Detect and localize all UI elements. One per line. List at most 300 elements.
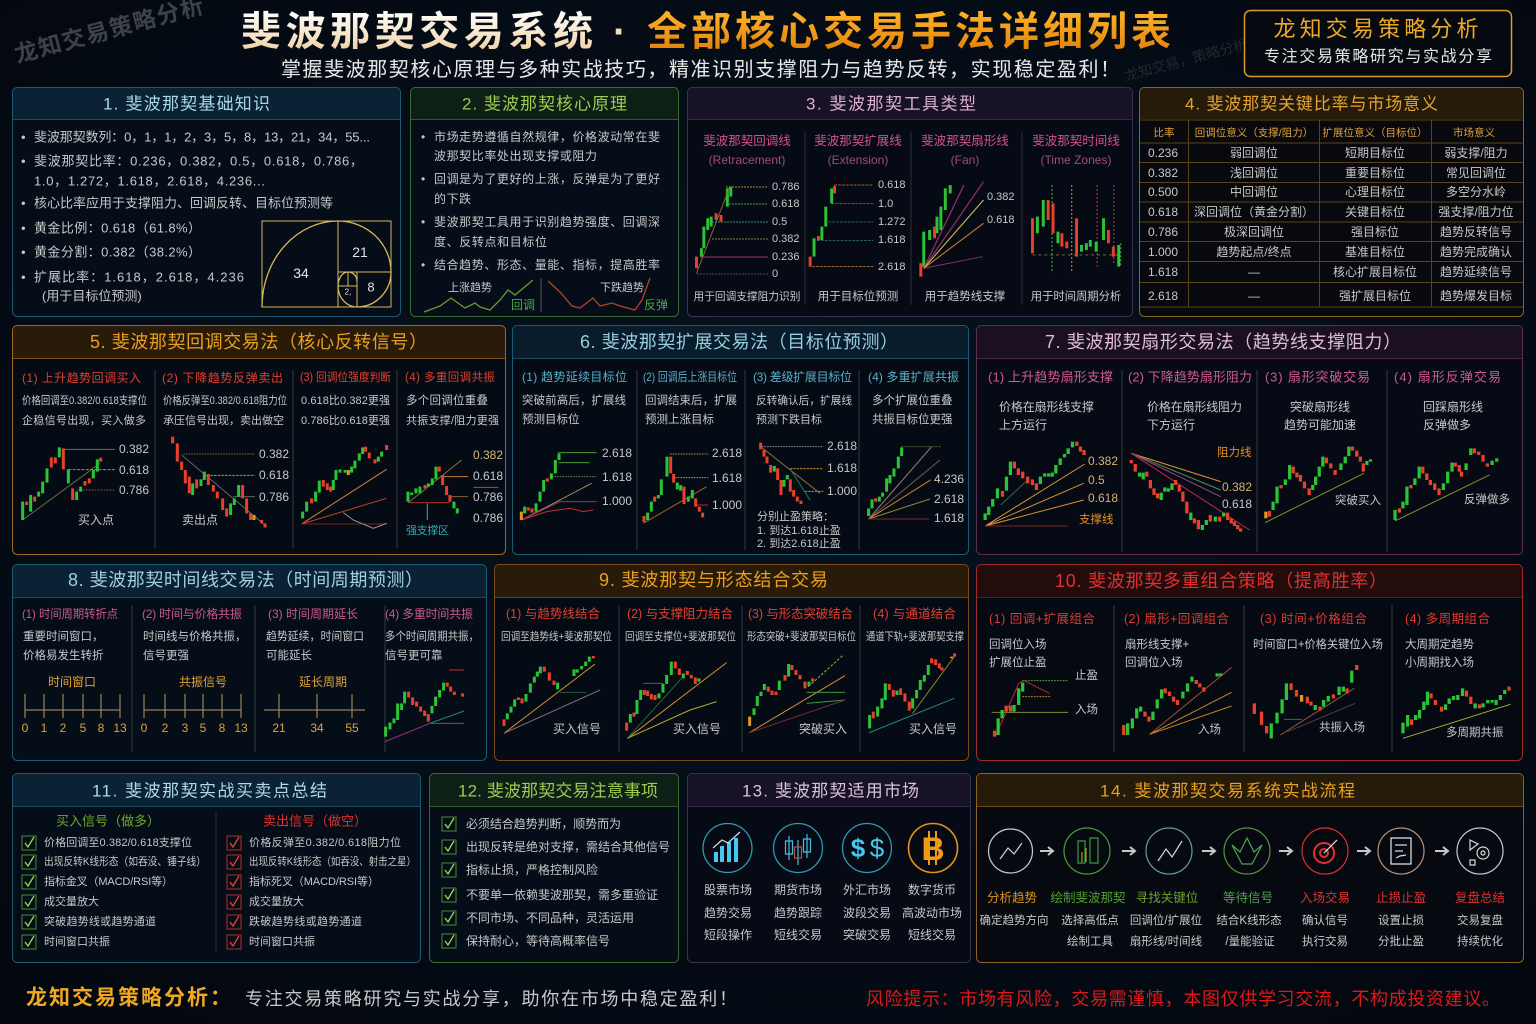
tool: fan: 斐波那契扇形线: [921, 133, 1009, 148]
tool: time zones: 斐波那契时间线: [1032, 134, 1120, 148]
sub-method 9.3: [747, 606, 856, 736]
tool: time zones: 用于时间周期分析: [1031, 289, 1121, 303]
icon: candles: [774, 824, 822, 872]
text list 2: 的下跌: [434, 191, 471, 206]
sub-method 5.1: 价格回调至0.382/0.618支撑位: [22, 393, 147, 407]
step details: 确认信号: [1302, 914, 1348, 927]
sell signals: 成交量放大: [249, 894, 304, 908]
step titles: 入场交易: [1300, 890, 1350, 905]
heading 6: 6. 斐波那契扩展交易法（目标位预测）: [580, 332, 898, 352]
market labels: 外汇市场: [843, 882, 891, 897]
tool: fan: 0.618: [987, 214, 1015, 226]
footer slogan: 专注交易策略研究与实战分享，助你在市场中稳定盈利！: [245, 989, 737, 1009]
sell signals: 价格反弹至0.382/0.618阻力位: [249, 835, 401, 849]
sub-method 5.4: 共振支撑/阻力更强: [406, 413, 499, 427]
text list 2: 度、反转点和目标位: [434, 234, 547, 249]
sub-method 8.2: 共振信号: [179, 675, 227, 689]
panel: 13 markets: [688, 774, 970, 962]
sub-method 9.2: (2) 与支撑阻力结合: [627, 606, 733, 621]
sub-method 7.4: (4) 扇形反弹交易: [1394, 370, 1501, 384]
step details: 交易复盘: [1457, 913, 1503, 927]
step details: 扇形线/时间线: [1130, 934, 1203, 948]
sub-method 8.4: [385, 607, 479, 742]
icon: forex: $: [851, 833, 866, 863]
golden spiral: 2,: [345, 288, 351, 296]
mini chart: downtrend: 反弹: [644, 298, 668, 312]
sub-method 7.2: 价格在扇形线阻力: [1147, 399, 1242, 414]
sub-method 6.1: 预测目标位: [522, 412, 580, 426]
sub-method 5.3: [300, 370, 391, 528]
brand box: 专注交易策略研究与实战分享: [1264, 48, 1492, 66]
text list 1: •: [21, 244, 26, 260]
sub-method 5.4: 0.786: [473, 511, 503, 525]
tool: time zones: (Time Zones): [1041, 153, 1111, 167]
tool: extension: 0.618: [878, 179, 906, 191]
sub-method 6.3: [753, 369, 857, 550]
golden spiral: [262, 221, 391, 307]
step titles: 分析趋势: [987, 890, 1037, 905]
text list 1: [21, 130, 370, 304]
step details: 确定趋势方向: [980, 913, 1048, 927]
sub-method 5.3: 0.618比0.382更强: [301, 394, 390, 407]
sub-method 7.2: [1128, 370, 1252, 532]
sub-method 8.2: 8: [219, 721, 226, 735]
sell signals: 出现反转K线形态（如吞没、射击之星）: [249, 854, 416, 868]
sub-method 6.4: (4) 多重扩展共振: [868, 370, 959, 384]
table body: [1148, 145, 1514, 303]
checklist: 保持耐心，等待高概率信号: [466, 933, 610, 948]
heading 1: 1. 斐波那契基础知识: [103, 94, 270, 114]
sub-method 10.3: [1253, 611, 1383, 738]
text list 1: •: [21, 196, 26, 210]
sub-method 6.1: (1) 趋势延续目标位: [522, 369, 627, 384]
sub-method 5.1: (1) 上升趋势回调买入: [22, 371, 141, 385]
sub-method 10.1: 回调位入场: [989, 637, 1046, 651]
sub-method 8.2: 13: [234, 721, 248, 735]
heading 11: 11. 斐波那契实战买卖点总结: [92, 782, 327, 800]
text list 1: •: [21, 130, 26, 144]
sub-method 8.1: [22, 606, 127, 735]
sub-method 6.1: 1.000: [602, 494, 632, 508]
sub-method 10.2: [1124, 611, 1232, 736]
heading 14: 14. 斐波那契交易系统实战流程: [1100, 782, 1355, 800]
sub-method 9.1: 买入信号: [553, 722, 601, 736]
sub-method 6.3: 预测下跌目标: [756, 412, 822, 426]
table body: 0.500: [1148, 185, 1178, 199]
table body: 强扩展目标位: [1339, 288, 1411, 303]
text list 1: 斐波那契比率：0.236，0.382，0.5，0.618，0.786，: [34, 154, 363, 168]
sub-method 9.2: 回调至支撑位+斐波那契位: [625, 629, 736, 643]
title: 斐波那契交易系统: [241, 10, 593, 54]
market labels: 短线交易: [774, 927, 822, 942]
sub-method 6.2: (2) 回调后上涨目标位: [643, 369, 737, 384]
table body: 强支撑/阻力位: [1438, 204, 1514, 219]
sub-method 10.2: 回调位入场: [1125, 655, 1182, 669]
step details: 回调位/扩展位: [1130, 913, 1202, 927]
step details: 设置止损: [1378, 913, 1424, 927]
sub-method 7.2: 阻力线: [1217, 445, 1252, 459]
sub-method 10.1: 入场: [1075, 702, 1098, 716]
text list 1: 1.0，1.272，1.618，2.618，4.236...: [34, 174, 265, 188]
text list 1: 斐波那契数列：0，1，1，2，3，5，8，13，21，34，55...: [34, 130, 370, 144]
heading 4: 4. 斐波那契关键比率与市场意义: [1185, 94, 1438, 114]
step titles: 寻找关键位: [1136, 890, 1198, 905]
sub-method 7.1: 0.618: [1088, 491, 1118, 505]
tool: extension: 1.0: [878, 198, 893, 210]
golden spiral: 21: [352, 244, 368, 260]
table body: 多空分水岭: [1446, 185, 1506, 199]
sub-method 9.2: [625, 606, 736, 738]
sub-method 9.2: 买入信号: [673, 722, 721, 736]
sub-method 7.4: [1394, 370, 1510, 521]
sub-method 10.1: (1) 回调+扩展组合: [989, 611, 1095, 626]
sub-method 9.4: 通道下轨+斐波那契支撑: [866, 629, 964, 643]
sub-method 8.1: 重要时间窗口，: [23, 629, 104, 643]
step titles: 止损止盈: [1376, 891, 1426, 905]
sub-method 9.4: 买入信号: [909, 722, 957, 736]
mini chart: downtrend: [548, 278, 668, 312]
table header: 扩展位意义（目标位）: [1322, 126, 1428, 139]
table body: 基准目标位: [1345, 244, 1405, 259]
sub-method 5.4: [405, 370, 503, 537]
sub-method 6.3: (3) 差级扩展目标位: [753, 369, 852, 384]
sub-method 8.4: 信号更可靠: [385, 648, 443, 662]
sub-method 5.4: 强支撑区: [406, 523, 449, 537]
panel: 5 retracement method: [12, 326, 506, 554]
brand box: [1244, 10, 1512, 76]
brand box: 龙知交易策略分析: [1274, 16, 1478, 42]
heading 10: 10. 斐波那契多重组合策略（提高胜率）: [1055, 571, 1387, 591]
buy signals: [22, 814, 206, 949]
text list 1: 扩展比率：1.618，2.618，4.236: [34, 270, 244, 284]
sub-method 8.1: 时间窗口: [48, 675, 96, 689]
sub-method 10.1: [989, 611, 1098, 737]
sub-method 9.1: 回调至趋势线+斐波那契位: [501, 629, 612, 643]
title: 全部核心交易手法详细列表: [647, 10, 1171, 54]
table body: 心理目标位: [1345, 184, 1405, 199]
checklist: 出现反转是绝对支撑，需结合其他信号: [466, 839, 670, 854]
buy signals: 买入信号（做多）: [56, 814, 160, 828]
sub-method 10.4: 小周期找入场: [1405, 655, 1474, 669]
tool: retracement: 0.786: [772, 181, 800, 193]
subtitle: 掌握斐波那契核心原理与多种实战技巧，精准识别支撑阻力与趋势反转，实现稳定盈利！: [281, 58, 1120, 81]
panel: 8 time method: [12, 564, 486, 760]
sub-method 7.2: (2) 下降趋势扇形阻力: [1128, 370, 1252, 384]
sub-method 6.2: 回调结束后，扩展: [645, 393, 737, 407]
title: ·: [613, 10, 626, 54]
text list 2: 斐波那契工具用于识别趋势强度、回调深: [434, 214, 660, 229]
sub-method 5.1: 0.382: [119, 442, 149, 456]
tool: retracement: 0: [772, 268, 778, 280]
sub-method 8.2: [141, 606, 248, 735]
table body: 核心扩展目标位: [1333, 264, 1417, 279]
panel: 2 principles: [410, 88, 678, 316]
sub-method 5.1: 0.618: [119, 463, 149, 477]
buy signals: 价格回调至0.382/0.618支撑位: [44, 835, 192, 849]
sub-method 10.4: [1403, 611, 1510, 739]
tool: retracement: (Retracement): [709, 153, 785, 167]
table body: 强目标位: [1351, 224, 1399, 239]
mini chart: uptrend: 上涨趋势: [448, 281, 492, 294]
sub-method 7.2: 下方运行: [1147, 417, 1195, 432]
checklist: 不同市场、不同品种，灵活运用: [466, 910, 634, 925]
text list 1: 黄金比例：0.618（61.8%）: [34, 220, 201, 236]
sub-method 8.3: [264, 607, 365, 735]
icon: stocks: [703, 824, 752, 872]
table body: 趋势完成确认: [1440, 244, 1512, 259]
sub-method 8.2: 0: [141, 721, 148, 735]
sub-method 10.2: 入场: [1198, 722, 1221, 736]
checklist: 指标止损，严格控制风险: [466, 862, 598, 877]
sub-method 6.4: 多个扩展位重叠: [872, 393, 952, 407]
panel: 11 buy sell summary: [12, 774, 420, 962]
heading 8: 8. 斐波那契时间线交易法（时间周期预测）: [68, 570, 423, 590]
sub-method 10.4: (4) 多周期组合: [1405, 611, 1490, 626]
text list 1: •: [21, 154, 26, 168]
sub-method 10.1: 止盈: [1075, 669, 1098, 682]
heading 2: 2. 斐波那契核心原理: [462, 94, 627, 114]
panel: 12 cautions: [430, 774, 678, 962]
sub-method 6.4: 4.236: [934, 472, 964, 486]
sell signals: 时间窗口共振: [249, 934, 315, 948]
sub-method 8.3: 可能延长: [266, 648, 312, 662]
sub-method 8.2: 3: [182, 721, 189, 735]
market labels: 趋势交易: [704, 905, 752, 920]
mini chart: downtrend: 下跌趋势: [600, 280, 644, 294]
text list 1: 核心比率应用于支撑阻力、回调反转、目标位预测等: [34, 196, 333, 210]
sub-method 6.2: 1.000: [712, 498, 742, 512]
sub-method 8.1: (1) 时间周期转折点: [22, 606, 118, 621]
table body: 重要目标位: [1345, 165, 1405, 180]
market labels: 短段操作: [704, 927, 752, 942]
table body: 极深回调位: [1224, 224, 1284, 239]
sub-method 6.2: 预测上涨目标: [645, 413, 714, 426]
tool: retracement: 0.236: [772, 251, 800, 263]
heading 13: 13. 斐波那契适用市场: [742, 782, 919, 800]
step details: 选择高低点: [1061, 913, 1119, 927]
sub-method 5.4: (4) 多重回调共振: [405, 370, 496, 384]
sub-method 5.4: 0.382: [473, 448, 503, 462]
sub-method 6.3: 2.618: [827, 439, 857, 453]
table body: 1.000: [1148, 245, 1178, 259]
golden spiral: 34: [293, 265, 309, 281]
sub-method 8.3: 55: [345, 721, 359, 735]
watermark faint right: 龙知交易，策略分析: [1123, 36, 1249, 84]
buy signals: 突破趋势线或趋势通道: [44, 914, 156, 928]
sub-method 8.1: 1: [41, 721, 48, 735]
sub-method 8.2: 信号更强: [143, 649, 189, 662]
sub-method 7.3: 突破扇形线: [1290, 399, 1350, 414]
icon: bitcoin: [908, 824, 958, 872]
sub-method 6.4: 1.618: [934, 511, 964, 525]
sub-method 5.2: 卖出点: [182, 513, 218, 527]
sub-method 9.3: (3) 与形态突破结合: [748, 606, 853, 621]
sell signals: [227, 814, 416, 949]
sub-method 10.4: 多周期共振: [1446, 725, 1504, 739]
sub-method 6.3: 1. 到达1.618止盈: [757, 524, 841, 537]
sub-method 10.1: 扩展位止盈: [989, 655, 1046, 669]
step titles: [987, 890, 1505, 905]
sub-method 5.1: 企稳信号出现，买入做多: [22, 413, 146, 427]
sub-method 6.1: 2.618: [602, 446, 632, 460]
text list 2: •: [421, 172, 425, 186]
sub-method 5.4: 多个回调位重叠: [406, 393, 488, 407]
table header: 比率: [1154, 126, 1174, 139]
checklist: 必须结合趋势判断，顺势而为: [466, 816, 621, 831]
text list 1: (用于目标位预测): [42, 288, 142, 304]
step details: 绘制工具: [1067, 934, 1113, 948]
tool: extension: (Extension): [828, 153, 888, 167]
golden spiral: 8: [367, 280, 375, 294]
table body: 趋势爆发目标: [1440, 288, 1512, 303]
text list 2: 市场走势遵循自然规律，价格波动常在斐: [434, 129, 660, 144]
text list 2: •: [421, 258, 425, 272]
table body: 1.618: [1148, 265, 1178, 279]
table body: 2.618: [1148, 289, 1178, 303]
tool: fan: 0.382: [987, 191, 1015, 203]
sub-method 9.4: (4) 与通道结合: [873, 606, 956, 621]
buy signals: 成交量放大: [44, 894, 99, 908]
panel: 6 extension method: [512, 326, 968, 554]
sell signals: 指标死叉（MACD/RSI等）: [249, 874, 379, 888]
sub-method 5.2: 0.786: [259, 490, 289, 504]
mini chart: uptrend: 回调: [511, 298, 535, 312]
table header: 市场意义: [1453, 126, 1495, 139]
tool: retracement: 0.618: [772, 198, 800, 210]
table body: 浅回调位: [1230, 165, 1278, 180]
sub-method 8.1: 价格易发生转折: [23, 648, 104, 662]
tool: retracement: 0.382: [772, 233, 800, 245]
step details: 结合K线形态: [1216, 913, 1282, 927]
text list 2: [421, 129, 660, 272]
panel: 3 tool types: [688, 88, 1132, 316]
heading 9: 9. 斐波那契与形态结合交易: [599, 570, 828, 590]
sub-method 7.2: 0.382: [1222, 480, 1252, 494]
tool: fan: 用于趋势线支撑: [925, 289, 1006, 303]
sub-method 8.1: 0: [22, 721, 29, 735]
tool: retracement: [694, 134, 800, 303]
icon: bitcoin: B: [921, 831, 945, 867]
table header: 回调位意义（支撑/阻力）: [1195, 126, 1313, 139]
text list 2: 波那契比率处出现支撑或阻力: [434, 148, 597, 163]
table body: 深回调位（黄金分割）: [1194, 204, 1314, 219]
tool: extension: 斐波那契扩展线: [814, 134, 902, 148]
sub-method 8.1: 5: [80, 721, 87, 735]
tool: fan: (Fan): [951, 153, 979, 167]
step details: 分批止盈: [1378, 934, 1424, 948]
checklist: [442, 816, 670, 948]
icon: forex: [842, 824, 892, 872]
sub-method 5.2: 0.618: [259, 468, 289, 482]
text list 1: •: [21, 220, 26, 236]
sub-method 6.4: 2.618: [934, 492, 964, 506]
sub-method 6.3: 分别止盈策略：: [757, 509, 834, 523]
sub-method 5.3: 0.786比0.618更强: [301, 414, 390, 427]
table body: 中回调位: [1230, 184, 1278, 199]
sub-method 5.1: 0.786: [119, 483, 149, 497]
table body: —: [1248, 265, 1260, 279]
footer brand: 龙知交易策略分析：: [26, 986, 231, 1010]
sub-method 5.1: 买入点: [78, 513, 114, 527]
sub-method 7.1: 0.5: [1088, 473, 1105, 487]
sell signals: 卖出信号（做空）: [263, 814, 367, 828]
sub-method 8.2: (2) 时间与价格共振: [142, 606, 242, 621]
panel: 9 patterns: [494, 564, 968, 760]
sub-method 6.2: 1.618: [712, 471, 742, 485]
table body: 弱支撑/阻力: [1444, 145, 1508, 160]
text list 2: •: [421, 130, 425, 144]
sub-method 7.3: [1265, 370, 1381, 523]
sub-method 8.1: 8: [98, 721, 105, 735]
sub-method 6.4: 共振目标位更强: [872, 412, 953, 426]
tool: extension: [810, 134, 906, 303]
sub-method 6.3: 1.000: [827, 484, 857, 498]
step details: [980, 913, 1503, 948]
table header: [1154, 126, 1495, 139]
sub-method 6.2: [643, 369, 742, 523]
sell signals: 跌破趋势线或趋势通道: [249, 914, 362, 928]
step titles: 复盘总结: [1455, 890, 1505, 905]
step details: 执行交易: [1302, 934, 1348, 948]
sub-method 8.2: 时间线与价格共振，: [143, 629, 246, 643]
sub-method 8.3: 延长周期: [299, 675, 347, 689]
sub-method 7.3: 趋势可能加速: [1284, 418, 1356, 432]
sub-method 10.4: 大周期定趋势: [1405, 637, 1474, 651]
sub-method 8.2: 2: [162, 721, 169, 735]
panel: 7 fan method: [976, 326, 1522, 554]
heading 12: 12. 斐波那契交易注意事项: [458, 782, 658, 800]
sub-method 6.3: 1.618: [827, 461, 857, 475]
sub-method 6.1: [521, 369, 632, 520]
text list 1: 黄金分割：0.382（38.2%）: [34, 244, 201, 260]
text list 2: 结合趋势、形态、量能、指标，提高胜率: [434, 257, 660, 272]
sub-method 7.4: 回踩扇形线: [1423, 399, 1483, 414]
tool: extension: 用于目标位预测: [818, 289, 898, 303]
step titles: 等待信号: [1223, 890, 1273, 905]
table body: 趋势延续信号: [1440, 265, 1512, 279]
sub-method 8.2: 5: [200, 721, 207, 735]
sub-method 9.3: 形态突破+斐波那契目标位: [747, 629, 856, 643]
sub-method 7.1: (1) 上升趋势扇形支撑: [988, 370, 1113, 384]
sub-method 8.1: 2: [60, 721, 67, 735]
heading 3: 3. 斐波那契工具类型: [806, 94, 976, 114]
table body: 0.236: [1148, 146, 1178, 160]
sub-method 5.2: 0.382: [259, 447, 289, 461]
panel: 4 ratio table: [1140, 88, 1524, 316]
sub-method 9.3: 突破买入: [799, 721, 847, 736]
sub-method 7.1: 上方运行: [999, 417, 1047, 432]
sub-method 5.4: 0.786: [473, 490, 503, 504]
sub-method 8.3: 21: [272, 721, 286, 735]
sub-method 8.4: (4) 多重时间共振: [385, 607, 473, 621]
heading 7: 7. 斐波那契扇形交易法（趋势线支撑阻力）: [1045, 332, 1401, 352]
tool: extension: 2.618: [878, 261, 906, 273]
mini chart: uptrend: [424, 280, 535, 312]
step icons: [988, 828, 1503, 874]
market labels: 突破交易: [843, 927, 891, 942]
market labels: 波段交易: [843, 905, 891, 920]
table body: 常见回调位: [1446, 165, 1506, 180]
sub-method 8.3: 34: [310, 721, 324, 735]
sub-method 10.3: (3) 时间+价格组合: [1260, 611, 1367, 626]
sub-method 6.1: 1.618: [602, 470, 632, 484]
sub-method 5.1: [22, 371, 149, 527]
market labels: [704, 882, 962, 942]
table body: 短期目标位: [1345, 145, 1405, 160]
icon: forex: $: [870, 833, 885, 863]
table body: 趋势反转信号: [1440, 224, 1512, 239]
sub-method 7.4: 反弹做多: [1423, 417, 1471, 432]
